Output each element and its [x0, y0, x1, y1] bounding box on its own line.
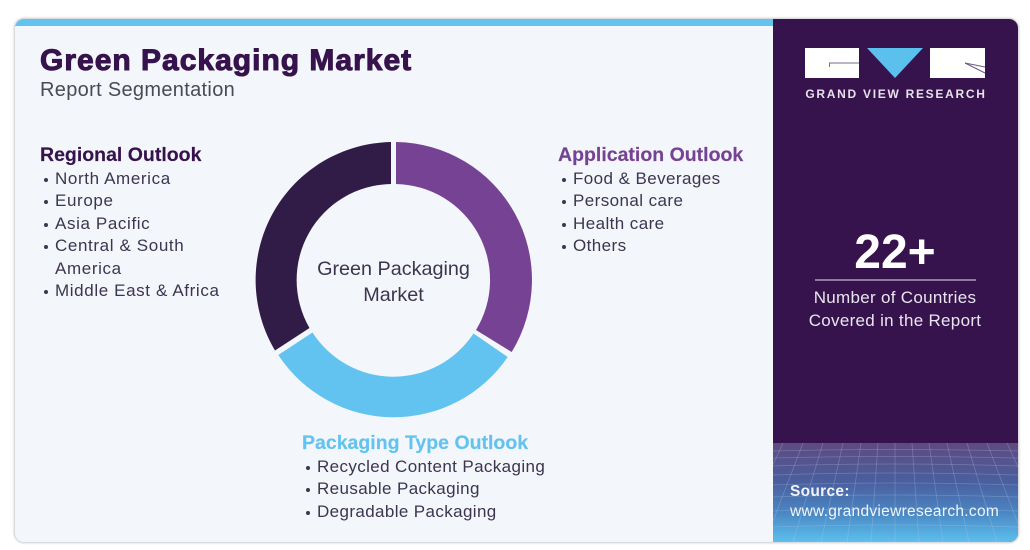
list: regions: Middle East & Africa	[55, 281, 220, 300]
stat: 22+ countries	[809, 226, 981, 330]
segment: regional	[256, 142, 391, 350]
list: applications	[562, 168, 721, 255]
title: Green Packaging Market	[40, 44, 412, 77]
list: packaging types	[306, 456, 545, 520]
list: regions: Asia Pacific	[55, 214, 150, 232]
list: packaging types: Reusable Packaging	[317, 479, 480, 498]
list: applications: Food & Beverages	[573, 168, 721, 188]
donut center label: Green Packaging	[317, 258, 470, 280]
logo text: GRAND VIEW RESEARCH	[805, 87, 987, 101]
heading: application outlook: Application Outlook	[558, 144, 743, 166]
logo: grand view research	[805, 48, 987, 101]
stat divider	[815, 279, 976, 281]
stat label	[809, 288, 981, 330]
list: applications: Others	[573, 236, 627, 255]
segment: packaging type	[278, 332, 508, 417]
heading: packaging type outlook: Packaging Type Outlook	[302, 432, 528, 454]
donut center label: Market	[363, 284, 424, 306]
source	[790, 483, 999, 520]
logo mark	[805, 48, 986, 78]
heading: regional outlook: Regional Outlook	[40, 144, 201, 166]
list: regions: North America	[55, 168, 171, 188]
segment: application	[396, 142, 532, 352]
list: packaging types: Recycled Content Packaging	[317, 456, 545, 476]
list: regions: Central & South	[55, 236, 184, 255]
stat label: Number of Countries	[814, 288, 976, 307]
panel: right sidebar	[773, 19, 1018, 542]
top accent bar	[15, 19, 773, 26]
list: regions	[44, 168, 220, 300]
panel: packaging type outlook	[302, 432, 545, 520]
panel: application outlook	[558, 144, 744, 255]
list: regions: America	[55, 258, 122, 278]
list: regions: Europe	[55, 191, 114, 210]
list: applications: Personal care	[573, 191, 683, 210]
source url: www.grandviewresearch.com	[790, 503, 999, 520]
stat number: 22+	[854, 226, 936, 279]
panel: regional outlook	[40, 144, 220, 300]
list: packaging types: Degradable Packaging	[317, 502, 497, 520]
source label: Source:	[790, 483, 850, 500]
donut chart	[256, 142, 532, 418]
footer grid graphic	[773, 443, 1018, 542]
list: applications: Health care	[573, 214, 665, 232]
donut center label	[317, 258, 470, 306]
subtitle: Report Segmentation	[40, 79, 235, 101]
stat label: Covered in the Report	[809, 311, 981, 330]
